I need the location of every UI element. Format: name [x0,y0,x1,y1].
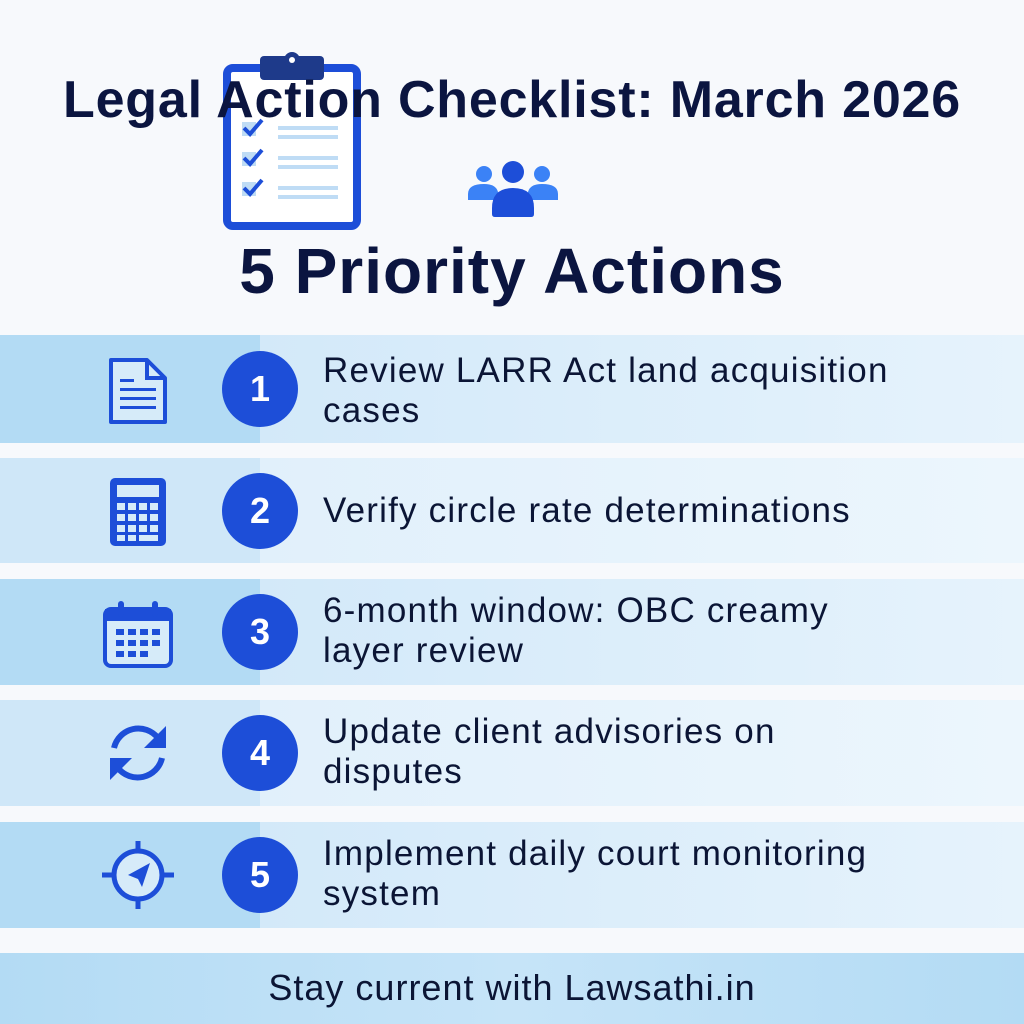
number 5 [222,837,298,913]
text 5: Implement daily court monitoring [323,834,867,873]
subtitle: 5 Priority Actions [239,235,785,307]
row 3 [0,579,1024,685]
icon: compass [102,841,174,909]
number 5: 5 [250,854,270,895]
icon: clipboard [223,52,361,230]
icon: refresh [110,726,166,780]
number 2 [222,473,298,549]
row 4 [0,700,1024,806]
number 2: 2 [250,490,270,531]
number 4: 4 [250,732,270,773]
text 1: cases [323,391,420,430]
row 1 [0,335,1024,443]
text 1: Review LARR Act land acquisition [323,351,889,390]
text 3 [323,591,829,670]
number 1: 1 [250,368,270,409]
icon: calculator [110,478,166,546]
text 4: disputes [323,752,463,791]
row 2 [0,458,1024,563]
text 3: 6-month window: OBC creamy [323,591,829,630]
icon: people [468,161,558,217]
text 5 [323,834,867,913]
number 4 [222,715,298,791]
text 4: Update client advisories on [323,712,776,751]
number 3: 3 [250,611,270,652]
row 5 [0,822,1024,928]
footer [0,953,1024,1024]
text 1 [323,351,889,430]
text 5: system [323,874,441,913]
number 1 [222,351,298,427]
icon: document [109,358,167,424]
text 4 [323,712,776,791]
text 3: layer review [323,631,524,670]
footer: Stay current with Lawsathi.in [268,967,756,1008]
number 3 [222,594,298,670]
title: Legal Action Checklist: March 2026 [63,71,961,129]
text 2: Verify circle rate determinations [323,491,851,530]
icon: calendar [103,601,173,668]
